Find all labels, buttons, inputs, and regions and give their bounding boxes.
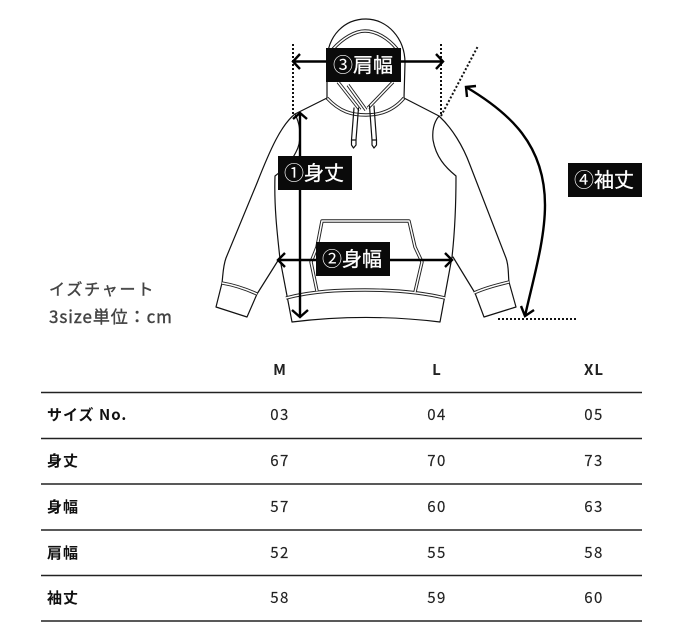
label: shoulder width: ③肩幅 (333, 49, 393, 78)
body outline (275, 98, 456, 322)
kangaroo pocket (311, 221, 422, 292)
label: body width: ②身幅 (322, 243, 382, 272)
hoodie line drawing (216, 19, 516, 322)
table header (273, 359, 604, 380)
row: size number: サイズ No. (47, 404, 127, 425)
waist rib (286, 290, 445, 298)
row: body width (47, 496, 604, 517)
row: body length: 70 (427, 450, 447, 471)
label: shoulder width (326, 48, 401, 82)
row: shoulder width (47, 542, 604, 563)
label: sleeve length (568, 163, 642, 197)
label: body length (278, 156, 352, 190)
table header: L (432, 359, 442, 380)
cuffs (222, 282, 509, 294)
table header: M (273, 359, 287, 380)
row: shoulder width: 58 (584, 542, 604, 563)
size table (41, 359, 642, 621)
row: sleeve length: 58 (270, 587, 290, 608)
row: body width: 身幅 (47, 496, 79, 517)
row: sleeve length: 60 (584, 587, 604, 608)
row: body length (47, 450, 604, 471)
row: body width: 63 (584, 496, 604, 517)
size chart caption: イズチャート (49, 276, 155, 300)
size chart caption (49, 276, 173, 328)
measurement guides (293, 44, 578, 319)
drawcords (352, 106, 376, 148)
table header: XL (584, 359, 604, 380)
right sleeve (439, 116, 516, 317)
arrow: shoulder width (293, 54, 443, 69)
row: size number: 03 (270, 404, 290, 425)
row: body length: 73 (584, 450, 604, 471)
label: body width (316, 242, 390, 276)
label: body length: ①身丈 (284, 157, 344, 186)
row: body width: 60 (427, 496, 447, 517)
row: sleeve length: 59 (427, 587, 447, 608)
row: body length: 67 (270, 450, 290, 471)
row: shoulder width: 肩幅 (47, 542, 79, 563)
arrow: sleeve length (466, 86, 545, 316)
row: sleeve length: 袖丈 (47, 587, 79, 608)
arrow: body width (278, 253, 452, 267)
row: size number (47, 404, 604, 425)
label: sleeve length: ④袖丈 (574, 164, 634, 193)
row: size number: 04 (427, 404, 447, 425)
hood (327, 19, 405, 115)
arrow: body length (292, 113, 308, 317)
row: shoulder width: 55 (427, 542, 447, 563)
row: body width: 57 (270, 496, 290, 517)
row: size number: 05 (584, 404, 604, 425)
row: sleeve length (47, 587, 604, 608)
size chart caption: 3size単位：cm (49, 303, 173, 328)
row: shoulder width: 52 (270, 542, 290, 563)
row: body length: 身丈 (47, 450, 79, 471)
left sleeve (216, 114, 295, 317)
